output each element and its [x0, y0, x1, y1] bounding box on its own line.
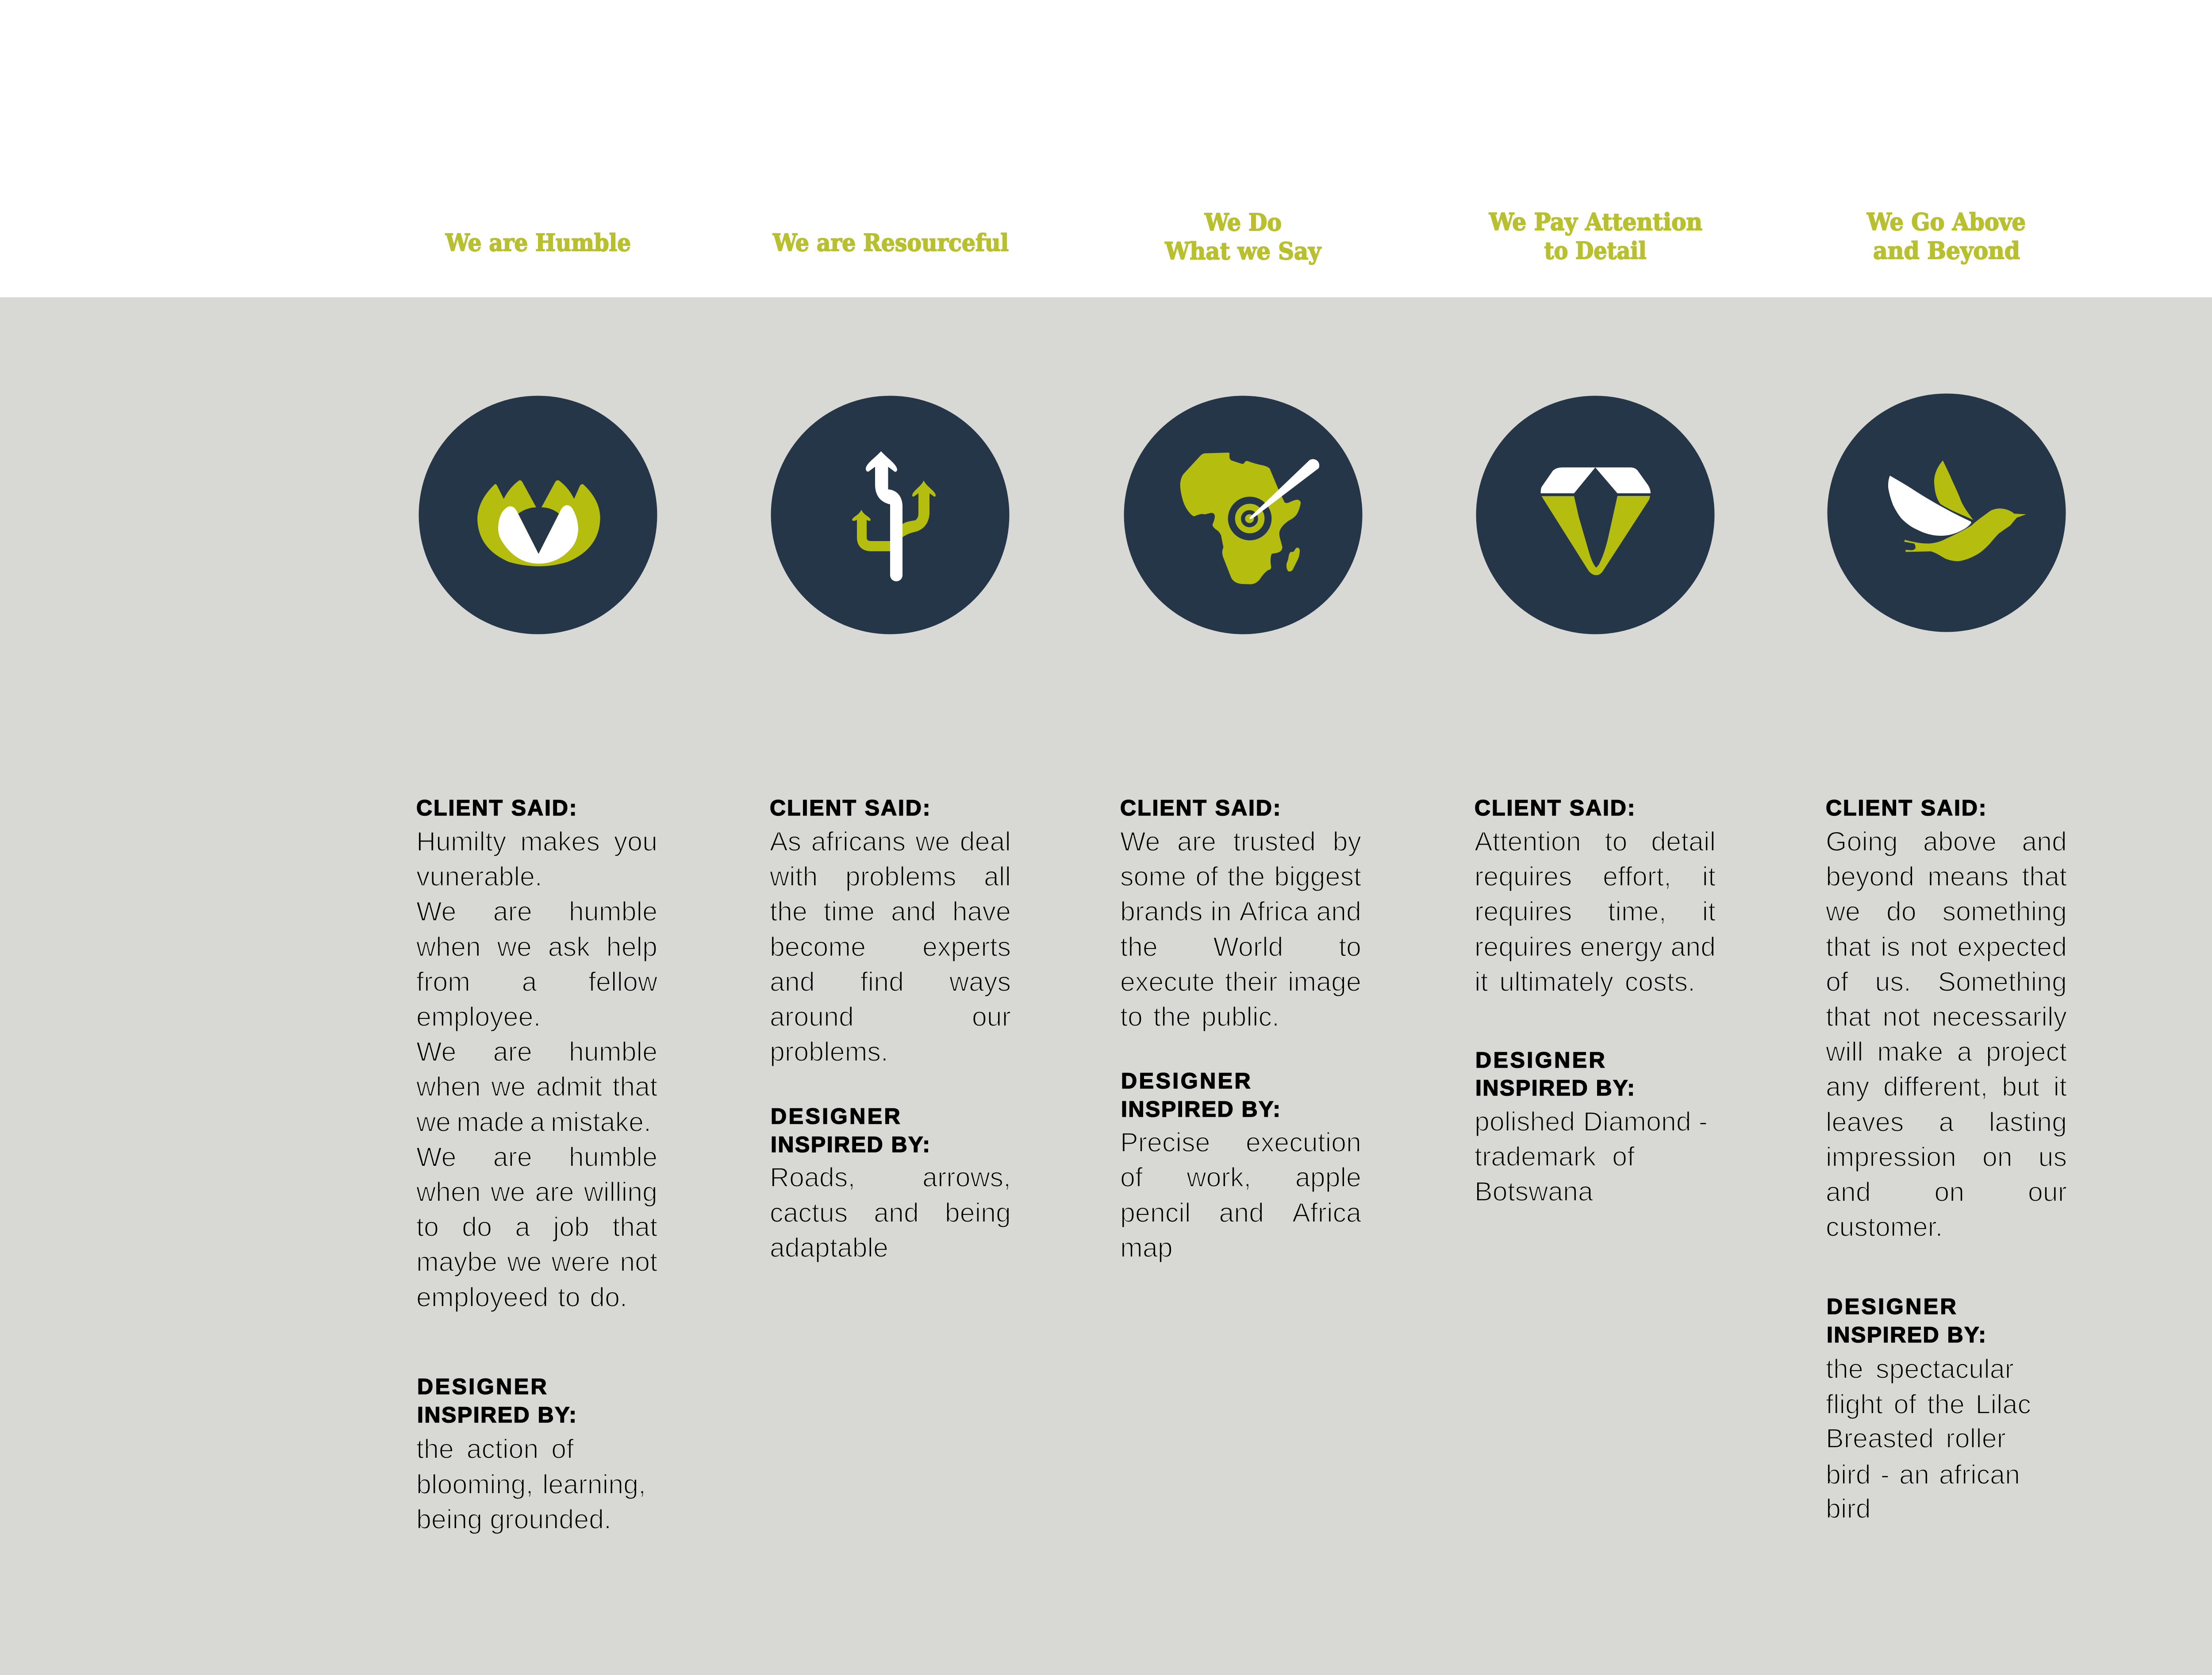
text: designer inspiration: the — [416, 1434, 454, 1464]
text: client statement: when — [416, 1177, 481, 1207]
text: client statement: from — [416, 967, 470, 997]
text: designer inspiration: adaptable — [770, 1233, 888, 1263]
text: client statement: ask — [548, 932, 590, 962]
text: client statement: in — [1210, 896, 1232, 926]
heading: We Go Above and Beyond: and Beyond — [1873, 237, 2020, 265]
text: client statement: we — [1826, 896, 1860, 926]
text: client statement: we — [491, 1072, 526, 1102]
text: client statement: lasting — [1989, 1107, 2067, 1137]
text: client statement: humble — [569, 1142, 657, 1172]
text: client statement: time — [824, 896, 875, 926]
label: client said: CLIENT SAID: — [1475, 795, 1636, 820]
text: designer inspiration: roller — [1946, 1423, 2006, 1453]
text: designer inspiration: Breasted — [1826, 1423, 1934, 1453]
text: designer inspiration: african — [1939, 1460, 2020, 1490]
text: client statement: it — [1702, 896, 1716, 926]
text: client statement: africans — [811, 826, 906, 857]
text: client statement: customer. — [1826, 1212, 1943, 1242]
text: client statement: a — [530, 1107, 545, 1137]
text: client statement: means — [1928, 861, 2008, 891]
text: client statement: As — [770, 826, 801, 857]
text: designer inspiration: execution — [1246, 1127, 1361, 1157]
text: client statement: beyond — [1826, 861, 1914, 891]
label: designer inspired by — [1826, 1292, 2067, 1349]
text: client statement: that — [2022, 861, 2067, 891]
text: designer inspiration: Africa — [1292, 1198, 1361, 1228]
label: designer inspired by: INSPIRED BY: — [417, 1402, 577, 1427]
text: client statement: a — [1939, 1107, 1954, 1137]
text: client statement: execute — [1120, 967, 1215, 997]
text: client statement: by — [1333, 826, 1361, 857]
text: client statement: problems — [845, 861, 956, 891]
text: client statement: us. — [1875, 967, 1911, 997]
text: client statement: ways — [949, 967, 1011, 997]
text: client statement — [1120, 824, 1362, 1034]
text: client statement: Going — [1826, 826, 1898, 857]
text: client statement: and — [1826, 1177, 1871, 1207]
text: designer inspiration: spectacular — [1876, 1354, 2014, 1384]
text: designer inspiration: and — [1219, 1198, 1264, 1228]
text: designer inspiration: being — [945, 1198, 1011, 1228]
text: client statement: the — [1153, 1002, 1191, 1032]
text: designer inspiration: apple — [1295, 1162, 1361, 1192]
text: client statement: Africa — [1240, 896, 1308, 926]
text: designer inspiration: grounded. — [490, 1504, 611, 1534]
text: client statement: become — [770, 932, 866, 962]
text: client statement: we — [491, 1177, 525, 1207]
label: designer inspired by: INSPIRED BY: — [1827, 1322, 1987, 1347]
label: designer inspired by: INSPIRED BY: — [1475, 1076, 1636, 1100]
text: client statement: it — [1702, 861, 1716, 891]
icon: branching arrows cactus in navy circle — [771, 396, 1010, 634]
label: designer inspired by: INSPIRED BY: — [771, 1132, 931, 1157]
text: client statement: we — [915, 826, 950, 857]
text: designer inspiration: cactus — [770, 1198, 848, 1228]
text: client statement: are — [493, 1037, 532, 1067]
label: designer inspired by: DESIGNER — [1827, 1294, 1958, 1319]
text: client statement: around — [770, 1002, 854, 1032]
text: designer inspiration — [770, 1160, 1011, 1266]
text: client statement: a — [522, 967, 537, 997]
text: client statement: that — [1826, 1002, 1871, 1032]
text: client statement — [1826, 824, 2067, 1245]
text: client statement: makes — [520, 826, 600, 857]
text: designer inspiration: of — [1120, 1162, 1143, 1192]
heading: We Do What we Say — [1165, 209, 1322, 265]
text: client statement: and — [1316, 896, 1361, 926]
text: client statement: some — [1120, 861, 1186, 891]
text: client statement: to — [1120, 1002, 1143, 1032]
heading: We Do What we Say: We Do — [1204, 209, 1282, 236]
label: designer inspired by: INSPIRED BY: — [1121, 1097, 1281, 1122]
text: designer inspiration: Diamond - — [1583, 1106, 1708, 1137]
text: client statement: when — [416, 1072, 481, 1102]
text: client statement: vunerable. — [416, 861, 542, 891]
text: client statement: but — [2002, 1072, 2039, 1102]
column: We Do What we Say text — [1120, 788, 1362, 1548]
text: designer inspiration: Botswana — [1475, 1176, 1593, 1206]
text: designer inspiration: arrows, — [922, 1162, 1011, 1192]
text: client statement: impression — [1826, 1142, 1956, 1172]
text: designer inspiration: an — [1899, 1460, 1929, 1490]
text: designer inspiration: Lilac — [1976, 1389, 2031, 1419]
text: client statement: of — [1826, 967, 1848, 997]
text: client statement: mistake. — [551, 1107, 651, 1137]
text: client statement: different, — [1883, 1072, 1988, 1102]
text: client statement: we — [497, 932, 532, 962]
text: client statement: a — [1957, 1037, 1972, 1067]
text: designer inspiration: the — [1927, 1389, 1965, 1419]
text: client statement: a — [515, 1212, 530, 1242]
text: client statement: our — [972, 1002, 1011, 1032]
label: client said: CLIENT SAID: — [416, 795, 578, 820]
text: client statement: fellow — [588, 967, 657, 997]
text: client statement: requires — [1475, 932, 1572, 962]
text: client statement: Attention — [1475, 826, 1581, 857]
text: client statement: We — [1120, 826, 1160, 857]
text: client statement: We — [416, 1142, 456, 1172]
text: client statement — [1475, 824, 1716, 999]
text: client statement: are — [493, 896, 532, 926]
text: client statement: make — [1877, 1037, 1943, 1067]
text: client statement: admit — [536, 1072, 602, 1102]
label: designer inspired by: DESIGNER — [771, 1104, 902, 1129]
text: client statement: employeed — [416, 1282, 548, 1312]
text: client statement: costs. — [1625, 967, 1695, 997]
text: designer inspiration: blooming, — [416, 1469, 534, 1499]
column: We Pay Attention to Detail text — [1475, 788, 1716, 1548]
text: client statement: their — [1225, 967, 1278, 997]
label: client said: CLIENT SAID: — [1120, 795, 1282, 820]
text: client statement: not — [620, 1247, 657, 1277]
column: We are Humble text — [416, 788, 658, 1548]
text: client statement: and — [2022, 826, 2067, 857]
text: designer inspiration — [1475, 1104, 1716, 1210]
text: client statement — [770, 824, 1011, 1070]
text: client statement: requires — [1475, 861, 1572, 891]
text: client statement: maybe — [416, 1247, 497, 1277]
label: designer inspired by — [1475, 1046, 1716, 1102]
label: designer inspired by — [416, 1372, 658, 1429]
heading: We Go Above and Beyond: We Go Above — [1866, 208, 2026, 236]
text: client statement: the — [770, 896, 807, 926]
text: client statement: find — [860, 967, 904, 997]
icon: lotus flower in navy circle — [419, 396, 657, 634]
icon: Africa map with target and pencil in navy circle — [1124, 396, 1363, 634]
heading: We are Humble: We are Humble — [445, 229, 631, 257]
text: client statement: something — [1943, 896, 2067, 926]
text: client statement: is — [1881, 932, 1900, 962]
label: client said: CLIENT SAID: — [770, 795, 931, 820]
label: designer inspired by — [770, 1102, 1011, 1159]
text: client statement: and — [891, 896, 936, 926]
text: client statement: above — [1923, 826, 1997, 857]
text: client statement: experts — [922, 932, 1011, 962]
icon: diamond in navy circle — [1476, 396, 1715, 634]
text: client statement: made — [457, 1107, 524, 1137]
text: client statement: when — [416, 932, 481, 962]
text: designer inspiration — [1120, 1125, 1362, 1266]
text: client statement — [416, 824, 658, 1315]
text: designer inspiration: and — [874, 1198, 919, 1228]
text: client statement: public. — [1202, 1002, 1279, 1032]
text: client statement: with — [770, 861, 818, 891]
heading: We Pay Attention to Detail: We Pay Attention — [1489, 208, 1702, 236]
text: client statement: do — [1886, 896, 1916, 926]
text: designer inspiration: learning, — [542, 1469, 646, 1499]
text: client statement: on — [1934, 1177, 1964, 1207]
text: client statement: We — [416, 1037, 456, 1067]
text: client statement: detail — [1651, 826, 1716, 857]
text: client statement: of — [1195, 861, 1218, 891]
text: client statement: it — [2054, 1072, 2067, 1102]
text: client statement: Humilty — [416, 826, 506, 857]
text: client statement: job — [553, 1212, 589, 1242]
text: designer inspiration — [1826, 1351, 2067, 1528]
label: client said: CLIENT SAID: — [1826, 795, 1987, 820]
label: designer inspired by: DESIGNER — [1121, 1068, 1252, 1093]
text: client statement: ultimately — [1499, 967, 1613, 997]
text: designer inspiration — [416, 1431, 658, 1537]
text: client statement: that — [1826, 932, 1871, 962]
column: We are Resourceful text — [770, 788, 1011, 1548]
text: client statement: are — [1177, 826, 1216, 857]
text: client statement: help — [607, 932, 657, 962]
text: client statement: have — [952, 896, 1011, 926]
text: client statement: it — [1475, 967, 1488, 997]
text: designer inspiration: - — [1881, 1460, 1889, 1490]
column: We Go Above and Beyond text — [1826, 788, 2067, 1548]
text: client statement: biggest — [1274, 861, 1361, 891]
text: client statement: on — [1982, 1142, 2012, 1172]
text: designer inspiration: Precise — [1120, 1127, 1210, 1157]
text: client statement: trusted — [1233, 826, 1316, 857]
text: client statement: necessarily — [1932, 1002, 2067, 1032]
text: designer inspiration: flight — [1826, 1389, 1883, 1419]
text: designer inspiration: bird — [1826, 1460, 1871, 1490]
text: client statement: us — [2039, 1142, 2067, 1172]
text: client statement: humble — [569, 1037, 657, 1067]
text: designer inspiration: trademark — [1475, 1141, 1596, 1172]
text: client statement: Something — [1938, 967, 2067, 997]
text: client statement: World — [1213, 932, 1283, 962]
text: designer inspiration: map — [1120, 1233, 1173, 1263]
text: client statement: and — [770, 967, 815, 997]
text: client statement: to — [558, 1282, 580, 1312]
text: client statement: any — [1826, 1072, 1869, 1102]
text: client statement: and — [1671, 932, 1716, 962]
text: client statement: deal — [960, 826, 1011, 857]
text: client statement: that — [612, 1072, 657, 1102]
text: designer inspiration: action — [467, 1434, 538, 1464]
text: client statement: we — [416, 1107, 451, 1137]
icon: lilac breasted roller bird in navy circle — [1827, 394, 2066, 632]
text: client statement: were — [552, 1247, 610, 1277]
label: designer inspired by — [1120, 1067, 1362, 1123]
text: client statement: are — [535, 1177, 574, 1207]
text: client statement: will — [1826, 1037, 1863, 1067]
text: designer inspiration: being — [416, 1504, 482, 1534]
text: client statement: the — [1120, 932, 1158, 962]
text: client statement: not — [1882, 1002, 1920, 1032]
text: client statement: are — [493, 1142, 532, 1172]
text: client statement: that — [612, 1212, 657, 1242]
text: designer inspiration: Roads, — [770, 1162, 855, 1192]
text: client statement: not — [1910, 932, 1947, 962]
text: designer inspiration: of — [551, 1434, 574, 1464]
text: client statement: all — [984, 861, 1011, 891]
text: designer inspiration: polished — [1475, 1106, 1575, 1137]
text: designer inspiration: pencil — [1120, 1198, 1190, 1228]
text: client statement: image — [1288, 967, 1361, 997]
text: client statement: you — [614, 826, 657, 857]
label: designer inspired by: DESIGNER — [1475, 1048, 1607, 1072]
text: client statement: humble — [569, 896, 657, 926]
heading: We are Resourceful: We are Resourceful — [772, 229, 1009, 257]
label: designer inspired by: DESIGNER — [417, 1374, 549, 1399]
heading: We Pay Attention to Detail: to Detail — [1544, 237, 1647, 265]
text: client statement: to — [416, 1212, 439, 1242]
text: client statement: project — [1986, 1037, 2067, 1067]
heading: We Pay Attention to Detail — [1489, 208, 1702, 265]
text: designer inspiration: of — [1894, 1389, 1916, 1419]
text: client statement: we — [507, 1247, 541, 1277]
text: client statement: requires — [1475, 896, 1572, 926]
text: client statement: do — [462, 1212, 492, 1242]
text: designer inspiration: work, — [1187, 1162, 1251, 1192]
text: client statement: problems. — [770, 1037, 888, 1067]
text: client statement: to — [1339, 932, 1361, 962]
text: client statement: employee. — [416, 1002, 541, 1032]
text: client statement: do. — [590, 1282, 627, 1312]
text: client statement: leaves — [1826, 1107, 1904, 1137]
text: client statement: brands — [1120, 896, 1203, 926]
text: designer inspiration: bird — [1826, 1494, 1871, 1524]
text: client statement: the — [1227, 861, 1265, 891]
text: client statement: our — [2028, 1177, 2067, 1207]
text: client statement: We — [416, 896, 456, 926]
text: client statement: effort, — [1603, 861, 1671, 891]
text: client statement: time, — [1608, 896, 1667, 926]
text: designer inspiration: the — [1826, 1354, 1863, 1384]
text: client statement: to — [1605, 826, 1627, 857]
text: client statement: willing — [584, 1177, 657, 1207]
heading: We Go Above and Beyond — [1866, 208, 2026, 265]
text: designer inspiration: of — [1612, 1141, 1635, 1172]
text: client statement: expected — [1957, 932, 2067, 962]
text: client statement: energy — [1580, 932, 1663, 962]
heading: We Do What we Say: What we Say — [1165, 238, 1322, 265]
